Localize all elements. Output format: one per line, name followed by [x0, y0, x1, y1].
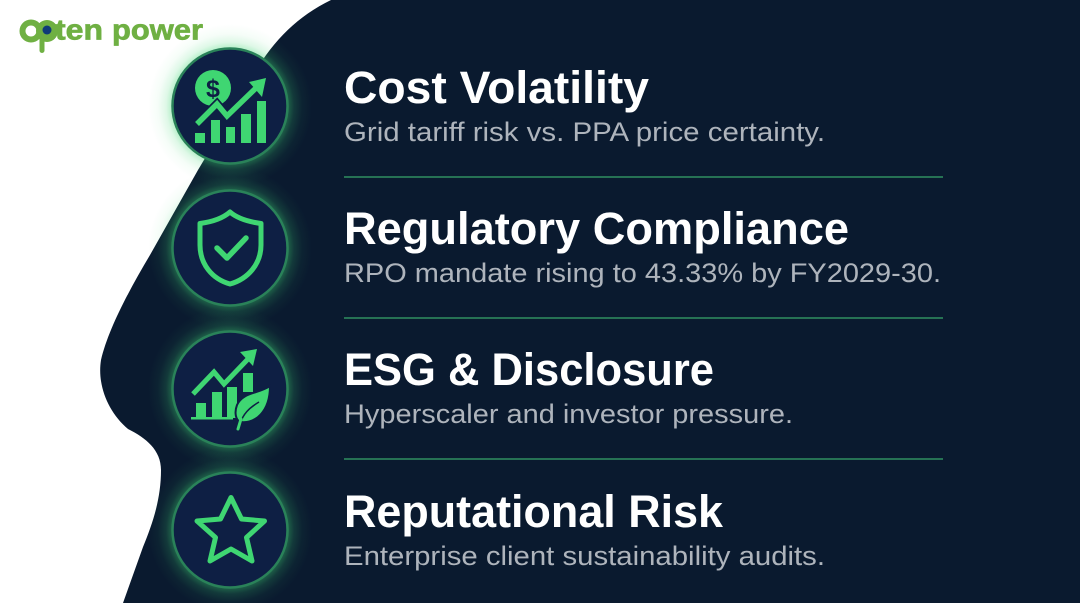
item: regulatory compliance	[344, 203, 941, 288]
icon badge: cost volatility: $	[206, 75, 220, 103]
description: Hyperscaler and investor pressure.	[344, 399, 793, 429]
icon badge: ESG and disclosure	[148, 307, 312, 471]
icon badge: regulatory compliance	[148, 166, 312, 330]
icon badge: reputational risk	[148, 448, 312, 603]
heading: Regulatory Compliance	[344, 203, 849, 254]
heading: Reputational Risk	[344, 486, 724, 537]
icon badge: cost volatility	[148, 24, 312, 188]
logo: open power: power	[112, 14, 203, 46]
heading: Cost Volatility	[344, 62, 649, 113]
description: RPO mandate rising to 43.33% by FY2029-30.	[344, 258, 941, 288]
item: ESG and disclosure	[344, 344, 793, 429]
logo: open power	[22, 14, 203, 53]
description: Grid tariff risk vs. PPA price certainty.	[344, 117, 825, 147]
heading: ESG & Disclosure	[344, 344, 714, 395]
description: Enterprise client sustainability audits.	[344, 541, 825, 571]
logo: open power: ten	[55, 14, 103, 46]
item: cost volatility	[344, 62, 825, 147]
item: reputational risk	[344, 486, 825, 571]
